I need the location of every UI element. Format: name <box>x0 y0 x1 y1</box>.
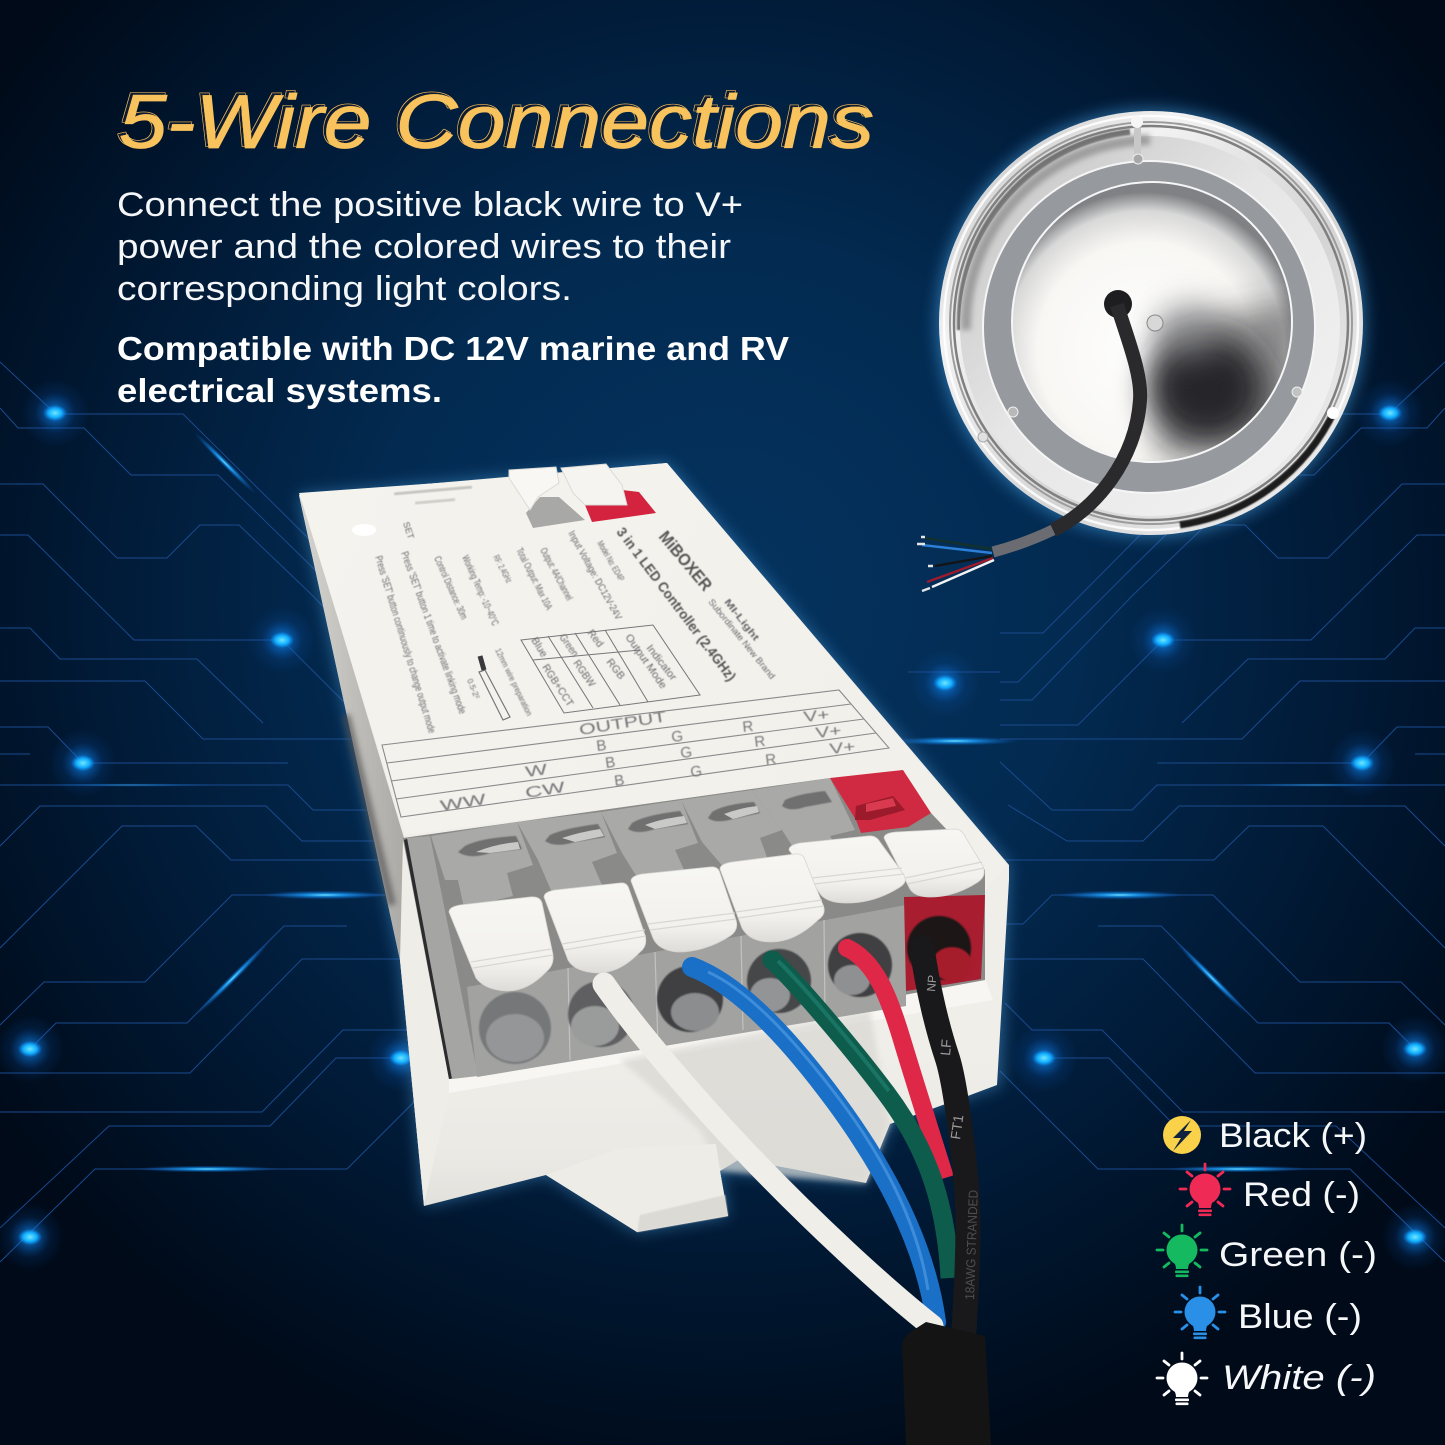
printed specifications: MI-Light <box>722 597 762 644</box>
indicator table: Blue <box>528 635 550 660</box>
output table: V+ <box>815 722 843 742</box>
printed specifications: Total Output: Max 10A <box>513 546 554 612</box>
housing silhouette <box>299 463 1009 1232</box>
rear connector <box>509 464 656 528</box>
hole 4 <box>747 949 811 1013</box>
set button and faint marks <box>352 524 376 536</box>
output table: R <box>764 751 777 769</box>
gray recessed ring <box>983 161 1315 493</box>
printed specifications: MiBOXER <box>655 527 716 595</box>
left gray strip <box>407 836 478 1079</box>
indicator table: RGBW <box>571 658 598 689</box>
terminal block <box>403 770 985 1079</box>
indicator table: Green <box>557 632 581 659</box>
printed specifications: Control Distance: 30m <box>431 555 469 621</box>
printed specifications: Model No: ED4P <box>595 539 626 583</box>
legend: blue: Blue (-) <box>1238 1298 1362 1336</box>
hole 1 <box>479 992 551 1064</box>
hole 2 <box>568 981 634 1047</box>
gray bridges <box>431 778 855 908</box>
top face <box>299 463 1007 890</box>
intro paragraph: corresponding light colors. <box>117 270 572 308</box>
printed specifications: 12mm wire preparation <box>493 646 535 718</box>
legend: white <box>1157 1353 1376 1405</box>
output table: CW <box>524 779 567 802</box>
indicator table: RGB+CCT <box>539 662 576 709</box>
printed specifications: Output: 4A/Channel <box>537 546 574 603</box>
wire preparation diagram <box>479 656 510 720</box>
output table <box>382 690 889 817</box>
indicator table <box>521 625 700 713</box>
black wire markings: 18AWG STRANDED <box>962 1190 981 1300</box>
legend: black positive: Black (+) <box>1219 1117 1367 1155</box>
lever slots <box>458 791 832 856</box>
screws <box>1131 116 1143 128</box>
indicator table: RGB <box>604 656 627 682</box>
printed specifications: Press 'SET' button continuously to change output mode <box>372 554 438 735</box>
black wire markings <box>924 974 981 1300</box>
black wire markings: NP <box>924 974 939 992</box>
output table: G <box>679 744 693 762</box>
legend: black positive <box>1163 1116 1367 1155</box>
recess shadow <box>403 778 985 1079</box>
output table: R <box>742 718 754 736</box>
intro paragraph <box>117 186 743 308</box>
wires <box>604 939 991 1445</box>
output table: V+ <box>803 706 831 726</box>
legend: red <box>1180 1164 1360 1216</box>
circuit board traces <box>0 362 1445 1271</box>
output table: V+ <box>829 738 857 758</box>
output table: W <box>524 761 550 781</box>
front block with holes <box>467 905 906 1077</box>
black wire markings: FT1 <box>947 1113 966 1140</box>
outer stainless rim <box>939 111 1363 535</box>
indicator table: Output Mode <box>623 632 669 691</box>
product: LED controller <box>299 463 1009 1445</box>
printed specifications: Press 'SET' button 1 time to activate linking mode <box>398 550 468 716</box>
green wire <box>762 950 950 1278</box>
intro paragraph: Connect the positive black wire to V+ <box>117 186 743 224</box>
printed specifications <box>372 521 777 735</box>
dome <box>1012 182 1292 462</box>
glowing nodes <box>21 379 89 447</box>
black cable <box>1053 305 1140 530</box>
red wire <box>838 939 945 1178</box>
compatibility note <box>117 330 789 409</box>
output table: B <box>604 754 616 772</box>
output table: G <box>670 728 684 746</box>
lever ridges <box>471 862 984 968</box>
cable grommet <box>1104 290 1132 318</box>
title: 5-Wire Connections <box>119 80 874 165</box>
legend: white: White (-) <box>1222 1359 1376 1397</box>
printed specifications: 0.5-2² <box>465 677 481 700</box>
red terminal <box>904 895 985 991</box>
indicator table: Indicator <box>644 642 679 683</box>
printed specifications: Input Voltage: DC12V-24V <box>565 529 624 622</box>
legend: green: Green (-) <box>1219 1236 1377 1274</box>
lamp halo <box>937 109 1365 537</box>
black wire markings: LF <box>937 1039 954 1056</box>
legend: blue <box>1175 1287 1362 1339</box>
output table: OUTPUT <box>578 708 668 739</box>
mounting tab <box>546 1144 728 1232</box>
legend: green <box>1157 1225 1377 1277</box>
printed specifications: RF: 2.4GHz <box>491 553 514 585</box>
compatibility note: Compatible with DC 12V marine and RV <box>117 330 789 367</box>
left side strip <box>299 495 449 1206</box>
output table: B <box>613 772 625 790</box>
product: round stainless light <box>917 109 1365 591</box>
indicator table: Red <box>585 627 606 650</box>
output table: G <box>689 763 703 781</box>
front lower shading <box>449 979 993 1093</box>
printed specifications: SET <box>401 521 416 541</box>
white wire <box>604 984 932 1326</box>
printed specifications: Working Temp: -10~40°C <box>459 554 500 628</box>
output table: R <box>753 733 766 751</box>
compatibility note: electrical systems. <box>117 372 442 409</box>
legend: red: Red (-) <box>1243 1176 1360 1214</box>
white levers <box>449 829 984 991</box>
printed specifications: 3 in 1 LED Controller (2.4GHz) <box>614 524 740 684</box>
bare wires <box>917 537 994 591</box>
printed specifications: Subordinate New Brand <box>706 597 777 681</box>
cable jacket <box>902 1322 991 1445</box>
blue wire <box>692 967 936 1322</box>
black wire <box>922 948 968 1330</box>
red lever <box>830 770 931 833</box>
output table: B <box>595 737 607 755</box>
output table: WW <box>439 791 488 815</box>
intro paragraph: power and the colored wires to their <box>117 228 731 266</box>
wire colour legend <box>1157 1116 1377 1405</box>
controller halo <box>299 463 1009 1232</box>
hole 3 <box>657 966 723 1032</box>
hole 5 <box>828 933 892 997</box>
